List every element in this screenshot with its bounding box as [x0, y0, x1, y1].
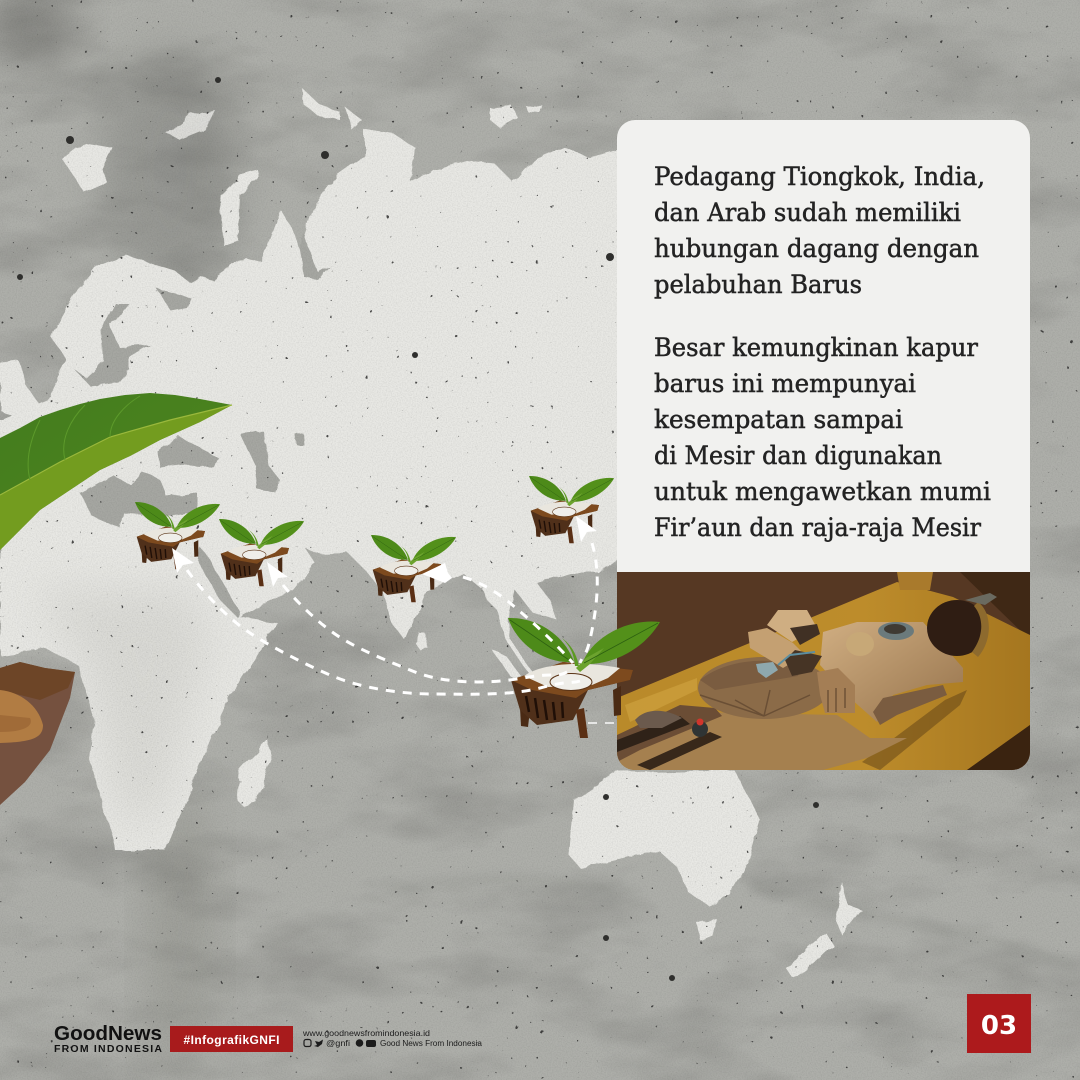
arrowheads [172, 516, 597, 587]
trade origin: Barus, camphor bowl [508, 618, 660, 738]
paragraph: trade relations: dan Arab sudah memiliki [654, 198, 961, 228]
text panel [617, 120, 1030, 770]
large pits in the concrete [17, 77, 819, 981]
folded hand [817, 668, 855, 713]
paragraph: camphor in Egypt: untuk mengawetkan mumi [654, 477, 991, 507]
paragraph: camphor in Egypt: Fir’aun dan raja-raja Mesir [654, 513, 982, 543]
footer: website and social [302, 1028, 483, 1048]
inland seas and gulfs [75, 232, 330, 618]
paragraph: camphor in Egypt: Besar kemungkinan kapur [654, 333, 979, 363]
trade stop: India [371, 535, 456, 602]
light tone variation over the land [30, 590, 210, 820]
paragraph: camphor in Egypt: barus ini mempunyai [654, 369, 916, 399]
footer: hashtag badge [170, 1026, 293, 1052]
icon: twitter [314, 1040, 323, 1047]
footer: logo [54, 1023, 162, 1055]
trade stop: Arabia [219, 519, 304, 586]
paragraph: trade relations: Pedagang Tiongkok, India, [654, 162, 985, 192]
paragraph: camphor in Egypt: kesempatan sampai [654, 405, 903, 435]
torso [820, 622, 963, 722]
paragraph: camphor in Egypt: di Mesir dan digunakan [654, 441, 942, 471]
page number badge: 03 [981, 1011, 1017, 1041]
lower arm [873, 685, 947, 725]
slab shadow [862, 690, 967, 770]
icon: instagram [304, 1040, 311, 1046]
footer: website and social: Good News From Indonesia [380, 1039, 483, 1048]
footer: hashtag badge: #InfografikGNFI [184, 1033, 280, 1047]
icon: facebook [356, 1039, 363, 1047]
bowl of almonds, cropped at left edge [0, 662, 75, 805]
photo: mummy of pharaoh [617, 572, 1030, 770]
trade stop: Egypt [135, 502, 220, 569]
paragraph: trade relations: hubungan dagang dengan [654, 234, 979, 264]
trade stop: China [529, 476, 614, 543]
footer: website and social: www.goodnewsfromindonesia.id [302, 1028, 430, 1038]
page number badge [967, 994, 1031, 1053]
sun-ray breastplate [698, 657, 830, 719]
paragraph: camphor in Egypt [654, 333, 991, 543]
mummy legs and wrappings [617, 712, 907, 770]
amulets [878, 622, 914, 640]
footer: logo: GoodNews [54, 1023, 162, 1045]
dashed trade routes [187, 543, 617, 723]
footer: website and social: @gnfi [326, 1039, 350, 1048]
footer: logo: FROM INDONESIA [54, 1043, 162, 1055]
large tea leaf [0, 393, 232, 550]
raised arms [748, 628, 805, 668]
head [927, 600, 987, 656]
paragraph: trade relations: pelabuhan Barus [654, 270, 862, 300]
icon: youtube [366, 1040, 376, 1047]
paragraph: trade relations [654, 162, 985, 300]
